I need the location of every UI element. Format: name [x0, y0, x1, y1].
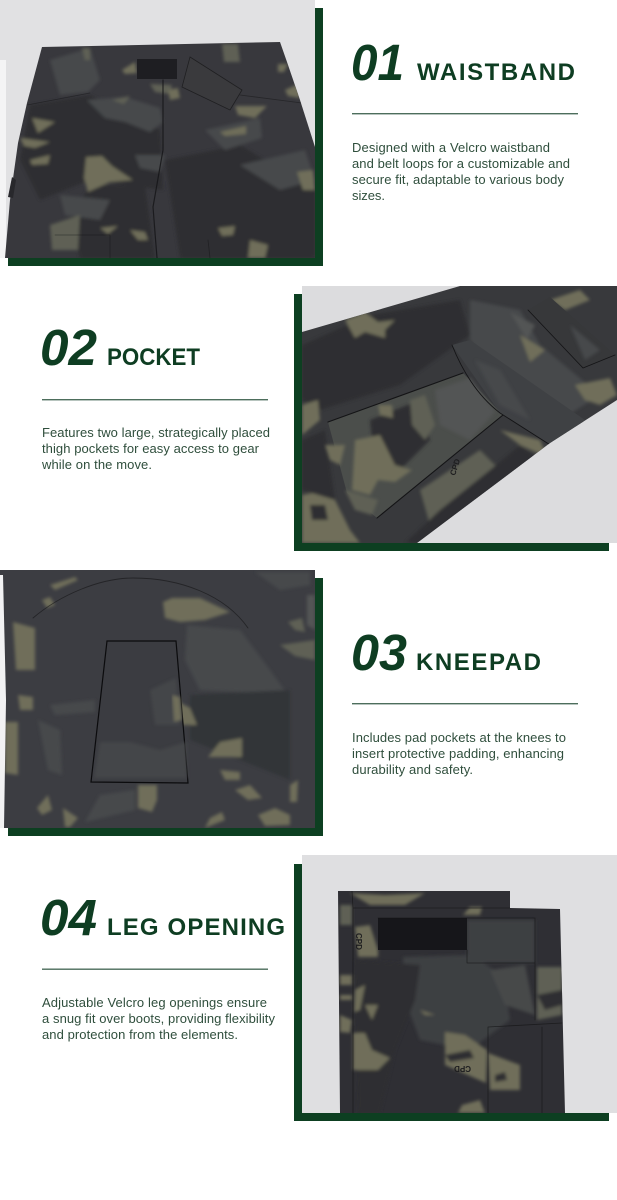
cargo pocket flap — [452, 340, 585, 448]
divider — [42, 399, 268, 400]
heading: waistband: WAISTBAND — [417, 59, 575, 86]
description: leg opening: a snug fit over boots, providing flexibility — [42, 1011, 276, 1026]
CPD prints — [354, 933, 471, 1073]
leg opening seams and side pocket — [352, 891, 562, 1113]
description: kneepad: Includes pad pockets at the knees to — [352, 730, 566, 745]
waist belt tab — [182, 57, 242, 110]
description: pocket: thigh pockets for easy access to gear — [42, 441, 260, 456]
photo panel: kneepad — [0, 570, 316, 828]
cargo pocket lower — [325, 373, 503, 518]
section 04: leg opening — [40, 855, 617, 1121]
description: leg opening: and protection from the elements. — [42, 1027, 238, 1042]
number 04: 04 — [40, 889, 97, 946]
description: pocket: Features two large, strategically placed — [42, 425, 270, 440]
upper pocket — [528, 297, 615, 368]
number 01: 01 — [351, 34, 404, 91]
photo panel: waistband — [0, 0, 316, 260]
description: kneepad: insert protective padding, enhancing — [352, 746, 564, 761]
green frame: leg opening photo — [294, 864, 609, 1121]
left paper edge — [0, 575, 6, 828]
description: waistband: sizes. — [352, 188, 385, 203]
heading: pocket: POCKET — [107, 344, 200, 371]
description: leg opening: Adjustable Velcro leg openings ensure — [42, 995, 267, 1010]
section 03: kneepad — [0, 570, 578, 836]
description: waistband: secure fit, adaptable to various body — [352, 172, 564, 187]
divider — [42, 968, 268, 970]
description: kneepad: durability and safety. — [352, 762, 473, 777]
section 01: waistband — [0, 0, 578, 266]
green frame: pocket photo — [294, 294, 609, 551]
description: pocket: while on the move. — [41, 457, 152, 472]
description: pocket — [41, 425, 270, 472]
photo panel: leg opening — [302, 855, 617, 1114]
CPD print: CPD — [448, 458, 462, 477]
green frame: kneepad photo — [8, 578, 323, 836]
divider — [352, 113, 578, 114]
section 02: pocket — [40, 286, 617, 551]
knee pad pocket opening — [91, 641, 188, 783]
knee pad seam arc — [33, 578, 248, 628]
photo panel: pocket — [302, 286, 617, 544]
CPD prints: CPD — [454, 1064, 471, 1073]
heading: kneepad: KNEEPAD — [416, 649, 541, 676]
description: waistband: and belt loops for a customizable and — [352, 156, 570, 171]
description: leg opening — [42, 995, 276, 1042]
velcro patch — [137, 59, 177, 79]
description: waistband — [352, 140, 570, 203]
description: kneepad — [352, 730, 566, 777]
CPD prints: CPD — [354, 933, 363, 950]
divider — [352, 703, 578, 704]
velcro strap — [378, 918, 467, 950]
number 02: 02 — [40, 319, 97, 376]
green frame: waistband photo — [8, 8, 323, 266]
number 03: 03 — [351, 624, 407, 681]
description: waistband: Designed with a Velcro waistband — [352, 140, 550, 155]
heading: leg opening: LEG OPENING — [107, 914, 285, 941]
